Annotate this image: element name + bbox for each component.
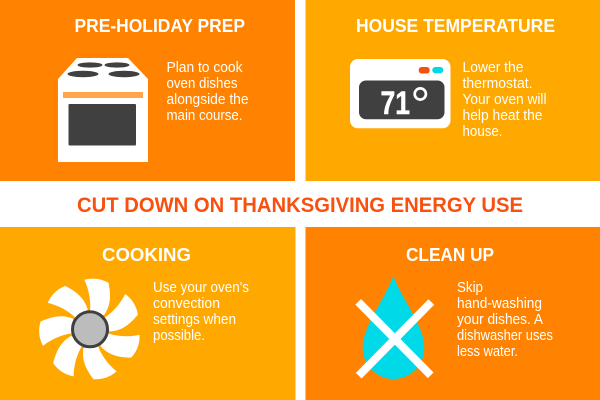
panel: house temperature — [306, 0, 600, 181]
icon: thermostat: 71 — [380, 85, 410, 121]
text: pre-holiday prep tip: alongside the — [166, 92, 248, 108]
text: pre-holiday prep tip: Plan to cook — [166, 60, 243, 76]
text: cooking tip: convection — [153, 296, 220, 312]
text: house temperature tip — [462, 60, 546, 140]
text: cooking tip: Use your oven's — [153, 280, 249, 296]
heading: clean up: CLEAN UP — [406, 245, 494, 265]
heading: pre-holiday prep: PRE-HOLIDAY PREP — [74, 16, 245, 36]
heading: house temperature: HOUSE TEMPERATURE — [356, 16, 555, 36]
text: house temperature tip: house. — [462, 124, 502, 140]
text: house temperature tip: thermostat. — [462, 76, 532, 92]
text: clean up tip — [457, 280, 553, 360]
heading: cooking: COOKING — [102, 245, 191, 265]
title: CUT DOWN ON THANKSGIVING ENERGY USE — [77, 194, 523, 217]
text: house temperature tip: Lower the — [462, 60, 524, 76]
text: cooking tip — [153, 280, 249, 344]
text: clean up tip: dishwasher uses — [457, 328, 553, 344]
icon: thermostat — [350, 59, 450, 128]
panel: clean up — [306, 227, 600, 400]
panel: cooking — [0, 227, 296, 400]
text: clean up tip: Skip — [457, 280, 483, 296]
text: house temperature tip: Your oven will — [462, 92, 546, 108]
text: cooking tip: possible. — [153, 328, 205, 344]
text: pre-holiday prep tip: oven dishes — [166, 76, 238, 92]
text: house temperature tip: help heat the — [462, 108, 542, 124]
icon: convection fan — [36, 279, 142, 384]
icon: crossed-out water drop — [358, 276, 431, 379]
text: clean up tip: hand-washing — [457, 296, 542, 312]
panel: pre-holiday prep — [0, 0, 295, 181]
text: clean up tip: your dishes. A — [457, 312, 543, 328]
text: cooking tip: settings when — [153, 312, 236, 328]
icon: oven — [58, 58, 148, 162]
text: clean up tip: less water. — [457, 344, 518, 360]
text: pre-holiday prep tip: main course. — [166, 108, 242, 124]
text: pre-holiday prep tip — [166, 60, 248, 124]
